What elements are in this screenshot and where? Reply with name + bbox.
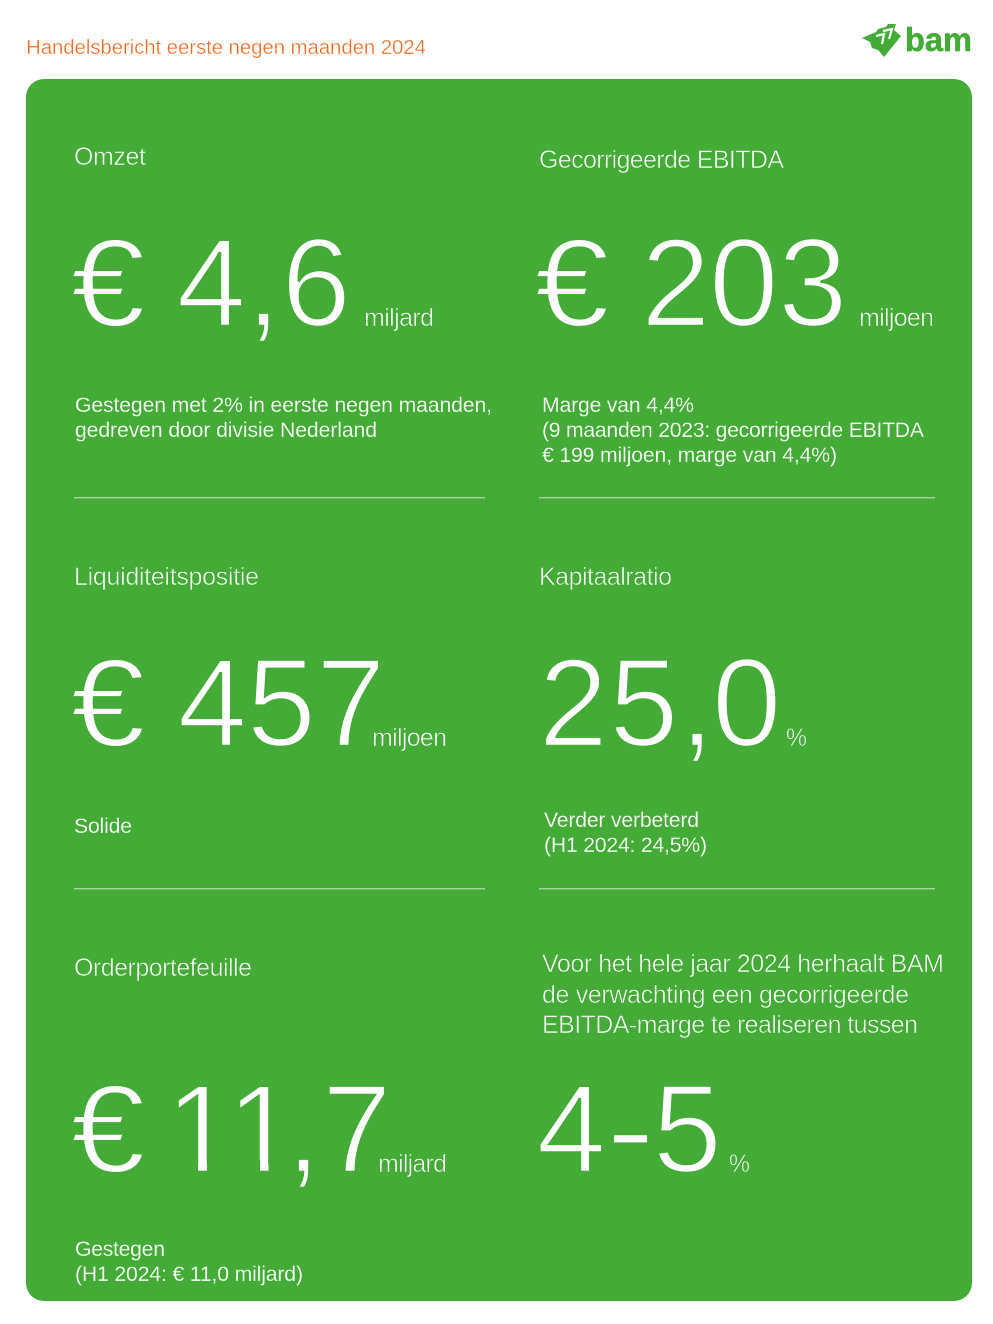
- text: orderportefeuille description: Gestegen: [75, 1238, 165, 1261]
- text: orderportefeuille description: (H1 2024: € 11,0 miljard): [75, 1263, 303, 1286]
- heading: kapitaalratio: Kapitaalratio: [539, 563, 672, 591]
- text: kapitaalratio description: [544, 809, 707, 857]
- heading: liquiditeitspositie: Liquiditeitspositie: [74, 563, 259, 591]
- value: 11,7 miljard: ,7: [286, 1060, 392, 1199]
- text: solide: Solide: [74, 815, 132, 838]
- value: 4,6 miljard: €: [70, 213, 146, 353]
- heading: gecorrigeerde EBITDA: Gecorrigeerde EBITDA: [539, 146, 784, 174]
- title: Handelsbericht eerste negen maanden 2024: [26, 36, 426, 59]
- text: EBITDA description: Marge van 4,4%: [542, 394, 694, 417]
- text: omzet description: gedreven door divisie Nederland: [75, 419, 377, 442]
- value: 4-5 %: -: [606, 1059, 655, 1199]
- value: 11,7 miljard: 11: [166, 1060, 297, 1199]
- value: 4-5 %: 4: [536, 1060, 606, 1199]
- value: 203 miljoen: miljoen: [859, 304, 934, 332]
- icon: bam logo: bam: [905, 21, 972, 58]
- value: 457 miljoen: [70, 633, 447, 773]
- text: vooruitzicht: Voor het hele jaar 2024 herhaalt BAM: [542, 950, 944, 978]
- value: 457 miljoen: 457: [178, 634, 386, 773]
- panel: orderportefeuille: [70, 954, 447, 1286]
- value: 25,0 %: %: [786, 724, 807, 752]
- heading: orderportefeuille: Orderportefeuille: [74, 954, 252, 982]
- panel: gecorrigeerde EBITDA: [534, 146, 934, 467]
- text: vooruitzicht: [542, 950, 944, 1039]
- text: omzet description: Gestegen met 2% in eerste negen maanden,: [75, 394, 492, 417]
- text: kapitaalratio description: (H1 2024: 24,5%): [544, 834, 707, 857]
- text: EBITDA description: [542, 394, 925, 467]
- icon: bam logo: [862, 21, 972, 58]
- value: 4,6 miljard: [70, 213, 434, 353]
- value: 25,0 %: 25,0: [538, 634, 782, 773]
- heading: omzet: Omzet: [74, 143, 146, 171]
- value: 203 miljoen: [534, 213, 934, 353]
- value: 457 miljoen: miljoen: [372, 724, 447, 752]
- text: vooruitzicht: EBITDA-marge te realiseren tussen: [542, 1011, 918, 1039]
- panel: liquiditeitspositie: [70, 563, 447, 838]
- text: EBITDA description: € 199 miljoen, marge van 4,4%): [542, 444, 837, 467]
- panel: vooruitzicht: [536, 950, 944, 1199]
- text: orderportefeuille description: [75, 1238, 303, 1286]
- value: 11,7 miljard: [70, 1059, 447, 1199]
- text: vooruitzicht: de verwachting een gecorrigeerde: [542, 981, 909, 1009]
- value: 457 miljoen: €: [70, 633, 146, 773]
- value: 4-5 %: [536, 1059, 750, 1199]
- value: 203 miljoen: 203: [641, 214, 848, 353]
- value: 11,7 miljard: €: [70, 1059, 146, 1199]
- value: 4-5 %: 5: [652, 1060, 722, 1199]
- value: 4,6 miljard: 4,6: [176, 214, 351, 353]
- panel: omzet: [70, 143, 492, 442]
- panel: kapitaalratio: [538, 563, 807, 857]
- value: 4,6 miljard: miljard: [364, 304, 434, 332]
- value: 11,7 miljard: miljard: [378, 1150, 447, 1178]
- value: 4-5 %: %: [729, 1150, 750, 1178]
- text: omzet description: [75, 394, 492, 442]
- value: 203 miljoen: €: [534, 213, 610, 353]
- text: EBITDA description: (9 maanden 2023: gecorrigeerde EBITDA: [542, 419, 925, 442]
- text: kapitaalratio description: Verder verbeterd: [544, 809, 699, 832]
